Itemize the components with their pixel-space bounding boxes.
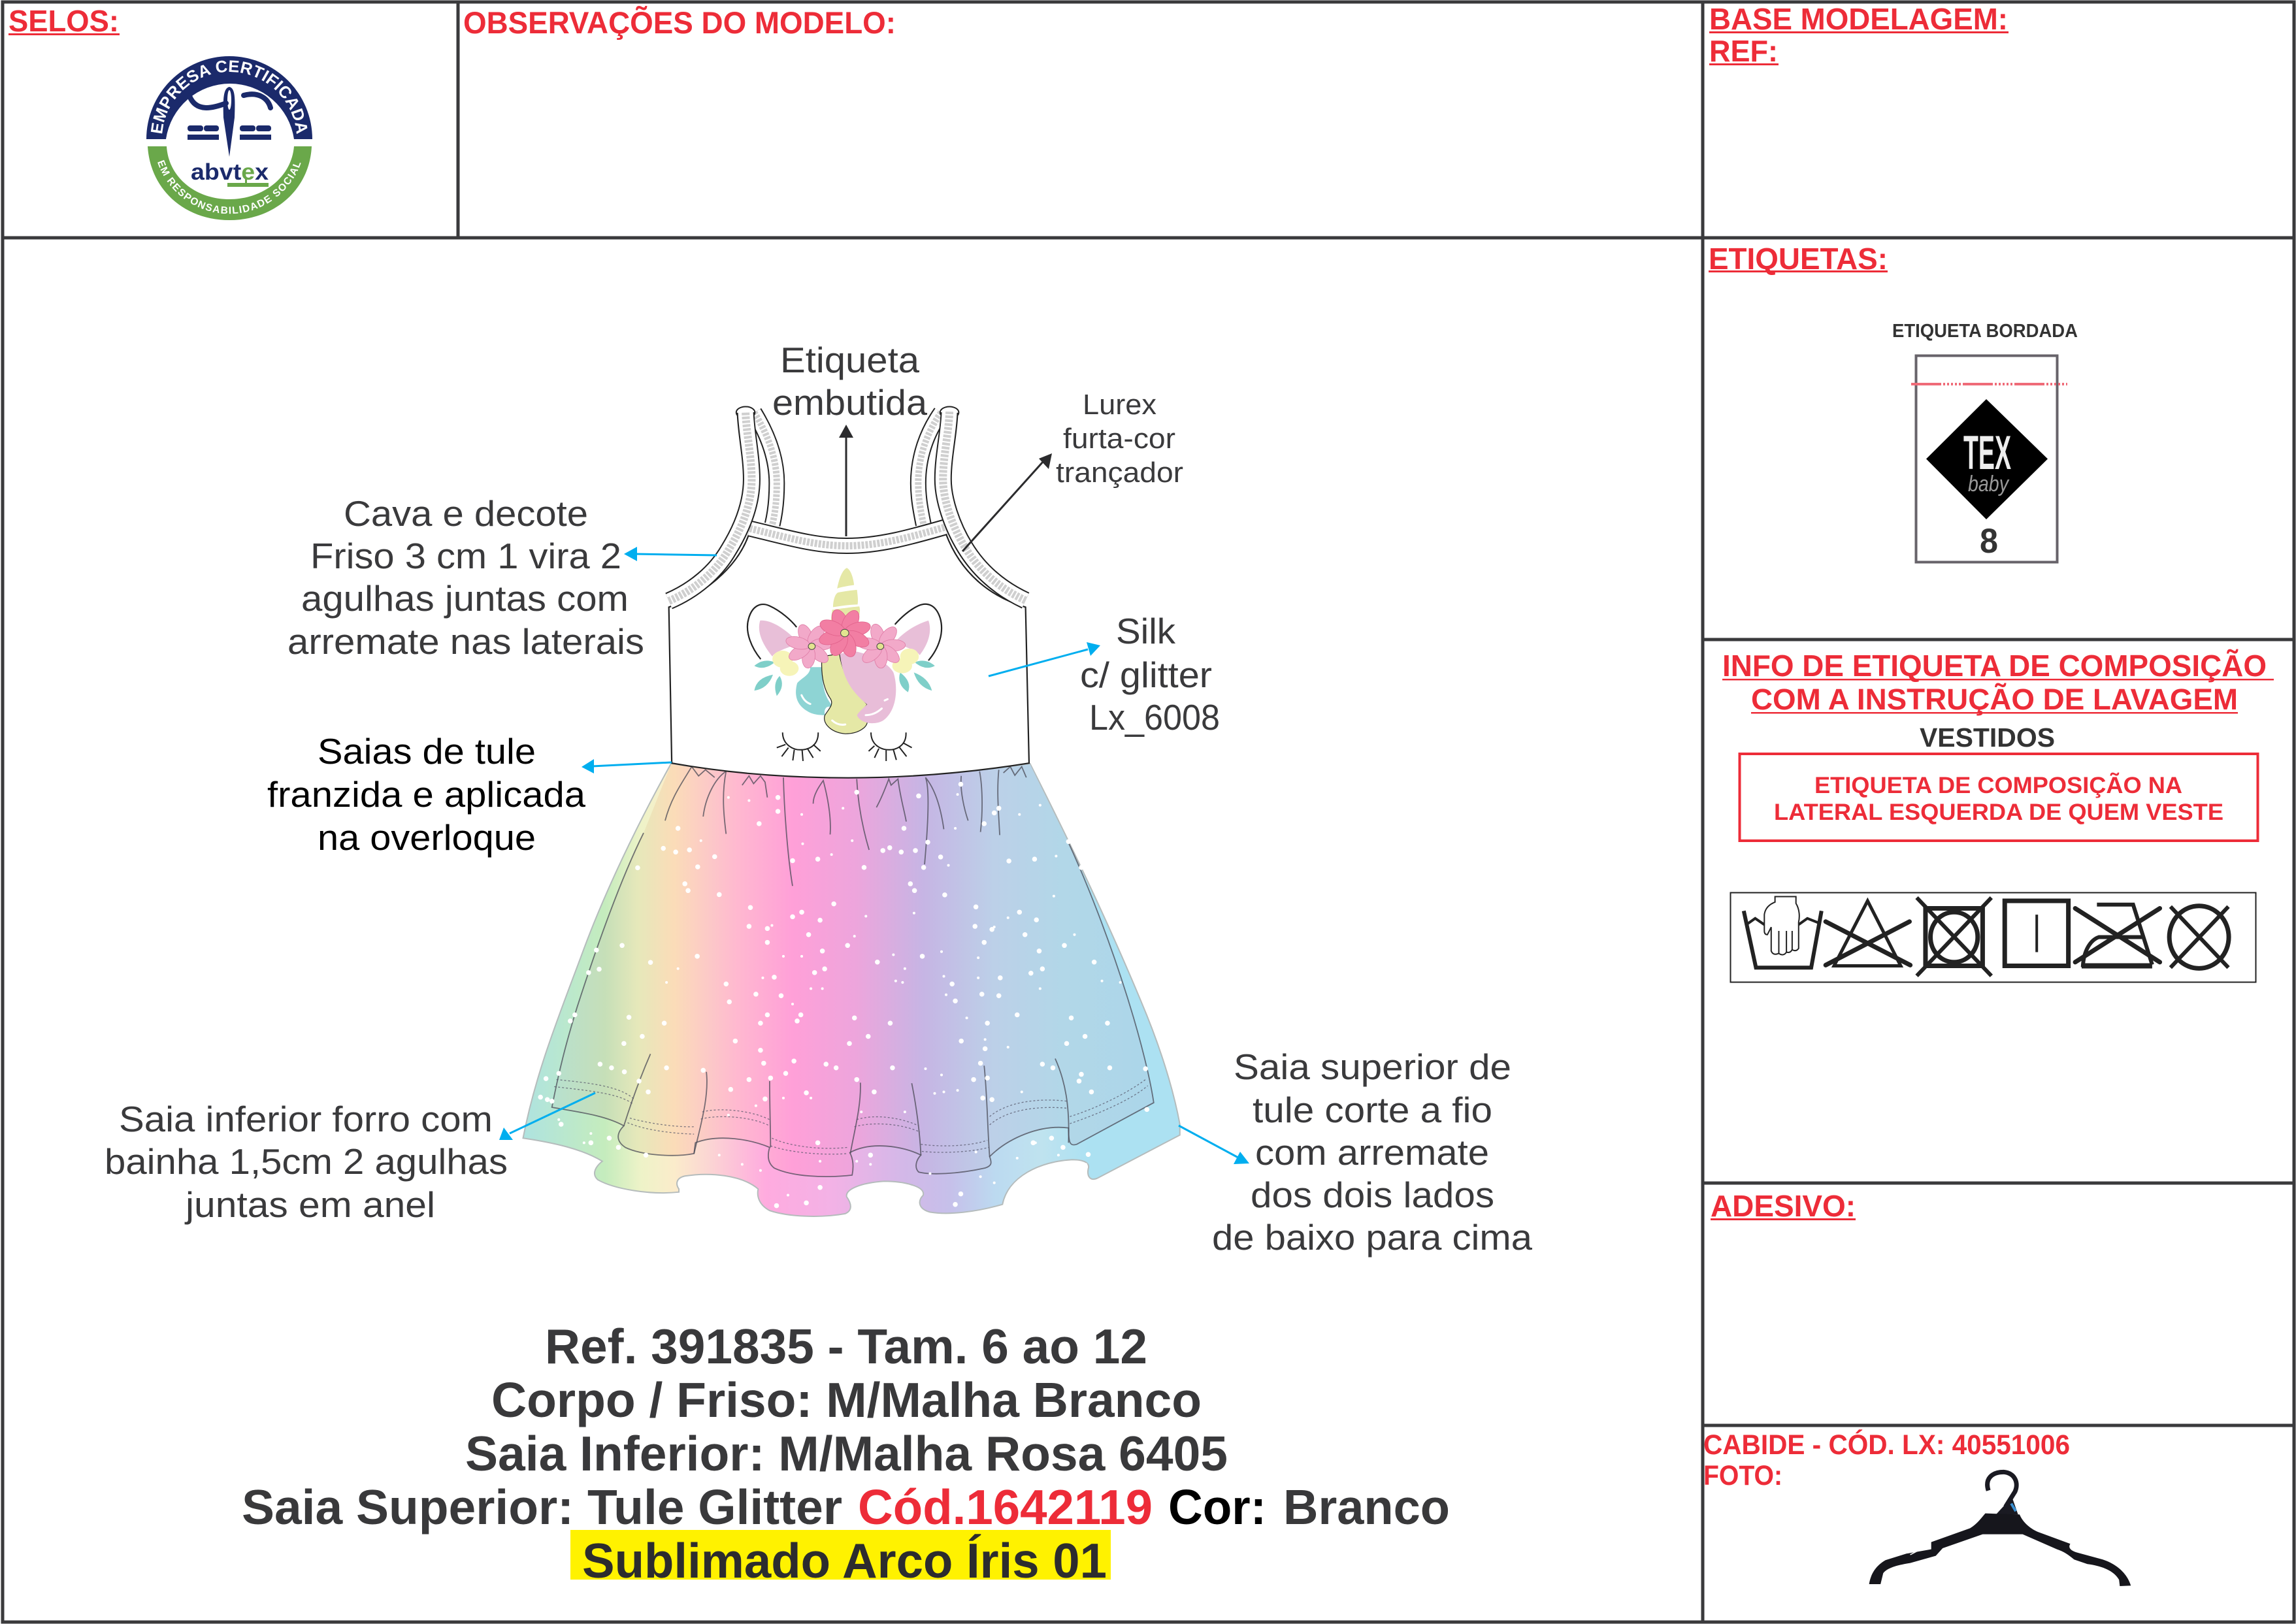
lower skirt line: Saia Inferior: M/Malha Rosa 6405 [465,1426,1228,1481]
pink flowers [785,623,906,669]
annotation: etiqueta embutida: Etiqueta [780,340,919,380]
callout: composition label position [1739,754,2258,841]
unicorn print [747,568,942,761]
panel: cabide [1703,1429,2131,1586]
heading: hanger code: CABIDE - CÓD. LX: 40551006 [1703,1429,2070,1461]
label caption: ETIQUETA BORDADA [1892,321,2078,342]
arrow: etiqueta embutida [839,425,853,536]
icon: abvtex certification seal: EM RESPONSABILIDADE SOCIAL [157,159,301,214]
annotation: saia superior: com arremate [1255,1132,1489,1173]
arrow: saias de tule [582,759,672,773]
annotation: saias de tule: Saias de tule [318,731,536,771]
annotation: saia superior: de baixo para cima [1212,1217,1532,1258]
panel: base modelagem and ref [1709,2,2009,68]
annotation: silk [1080,611,1220,738]
body fabric line: Corpo / Friso: M/Malha Branco [491,1372,1202,1427]
upper skirt line: Branco [1283,1480,1450,1535]
icon: line dry [2005,901,2069,966]
panel: info de etiqueta de composição [1722,649,2274,983]
illustration: unicorn dress technical drawing [523,406,1180,1216]
icon: do not tumble dry [1917,898,1992,976]
neck binding [749,527,945,546]
closed eyes with lashes [777,732,912,761]
heading: observações do modelo: OBSERVAÇÕES DO MODELO: [463,5,896,40]
heading: composition label info [1722,649,2274,716]
annotation: cava e decote: arremate nas laterais [287,621,644,662]
ears [747,604,942,660]
panel: etiquetas [1709,242,2078,562]
annotation: cava e decote: Cava e decote [344,493,588,534]
subheading: vestidos: VESTIDOS [1920,723,2055,753]
heading: composition label info: COM A INSTRUÇÃO DE LAVAGEM [1751,683,2238,716]
annotation: silk: Lx_6008 [1089,697,1220,738]
upper skirt line [242,1480,1450,1535]
embroidered label: TEX [1963,427,2011,479]
panel: selos [8,4,312,220]
arrow: cava e decote [624,547,717,561]
heading: base modelagem: BASE MODELAGEM: [1709,2,2008,36]
care symbols strip [1730,892,2255,983]
upper skirt line: Cor: [1168,1480,1266,1535]
annotation: cava e decote: agulhas juntas com [301,578,629,619]
glitter sparkles [540,784,1147,1206]
icon: abvtex certification seal [146,56,312,220]
skirt hem and side lines [552,767,1154,1177]
icon: do not dry clean [2169,906,2229,968]
embroidered label: 8 [1980,522,1998,560]
annotation: saia inferior: juntas em anel [184,1184,435,1225]
cream flowers [772,649,919,676]
icon: do not iron [2075,905,2160,967]
annotation: lurex: furta-cor [1063,423,1175,455]
annotation: etiqueta embutida [772,340,927,423]
upper skirt line: Saia Superior: Tule Glitter [242,1480,842,1535]
callout: composition label position: ETIQUETA DE COMPOSIÇÃO NA [1814,773,2182,798]
heading: ref: REF: [1709,34,1778,68]
horn [830,568,860,622]
annotation: saia inferior [105,1099,508,1225]
annotation: saia inferior: bainha 1,5cm 2 agulhas [105,1141,508,1182]
annotation: etiqueta embutida: embutida [772,382,927,423]
hem stitching [554,1080,1148,1154]
leaves [754,660,935,696]
annotation: silk: Silk [1116,611,1176,651]
annotation: saias de tule [267,731,585,858]
callout: composition label position: LATERAL ESQUERDA DE QUEM VESTE [1774,800,2223,825]
armhole bindings and front straps [669,406,1026,601]
reference line: Ref. 391835 - Tam. 6 ao 12 [545,1319,1147,1374]
bodice body [669,534,1029,778]
heading: etiquetas: ETIQUETAS: [1709,242,1888,276]
icon: hand wash [1744,897,1822,967]
heading: composition label info: INFO DE ETIQUETA DE COMPOSIÇÃO [1722,649,2267,683]
arrow: saia inferior [499,1093,595,1140]
arrow: saia superior [1179,1126,1249,1164]
icon: abvtex certification seal: abvtex [191,159,269,185]
bodice [669,406,1029,778]
skirt with rainbow sublimation [523,764,1180,1216]
embroidered label: baby [1968,472,2010,496]
annotation: saia superior: dos dois lados [1251,1175,1494,1215]
icon: abvtex certification seal: EMPRESA CERTIFICADA [150,60,307,135]
annotation: saia inferior: Saia inferior forro com [119,1099,493,1139]
heading: selos: SELOS: [8,4,119,38]
annotation: lurex: Lurex [1083,389,1156,421]
annotation: saias de tule: na overloque [318,817,536,858]
mane [796,667,835,715]
annotation: cava e decote [287,493,644,662]
annotation: saia superior: tule corte a fio [1253,1090,1492,1130]
annotation: silk: c/ glitter [1080,655,1212,695]
annotation: cava e decote: Friso 3 cm 1 vira 2 [310,536,621,576]
heading: foto: FOTO: [1703,1460,1782,1491]
text block: model reference and materials [242,1319,1450,1588]
arrow: silk [989,642,1100,676]
highlighted print line: Sublimado Arco Íris 01 [582,1533,1107,1588]
annotation: lurex [1056,389,1183,489]
annotation: saia superior [1212,1047,1532,1258]
annotation: saia superior: Saia superior de [1234,1047,1511,1087]
annotation: saias de tule: franzida e aplicada [267,774,585,815]
heading: adesivo: ADESIVO: [1711,1189,1856,1223]
icon: do not bleach [1826,901,1911,966]
upper skirt line: Cód.1642119 [858,1480,1153,1535]
embroidered label [1911,355,2067,562]
back straps [754,412,941,525]
icon: black hanger [1869,1472,2131,1586]
annotation: lurex: trançador [1056,457,1183,489]
arrow: lurex [962,453,1052,551]
